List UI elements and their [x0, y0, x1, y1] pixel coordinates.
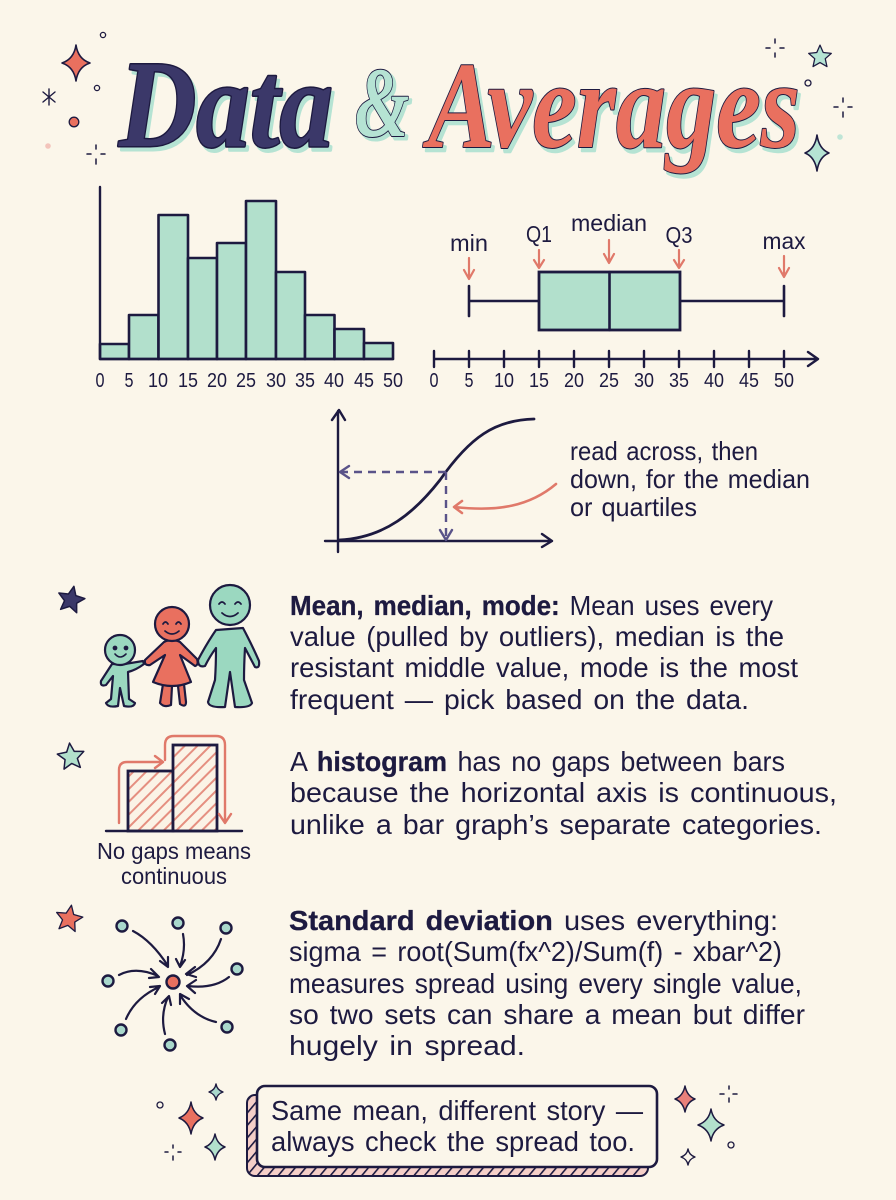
title word: Averages: Averages: [422, 37, 800, 174]
centre mean dot: [166, 976, 180, 988]
graph annotation: or quartiles: [570, 492, 697, 522]
box plot labels: Q1: [526, 221, 552, 247]
histogram axis labels: 15: [178, 370, 198, 392]
star bullet mint: [56, 742, 85, 770]
box plot number labels: 25: [599, 370, 619, 392]
flow arrow: [119, 736, 231, 823]
callout text: always check the spread too.: [271, 1126, 635, 1157]
graph axes: [325, 410, 552, 552]
box plot number labels: 40: [704, 370, 724, 392]
star bullet navy: [56, 584, 87, 614]
box plot number line: [434, 351, 818, 367]
box plot number labels: 20: [564, 370, 584, 392]
title sparkles left: [43, 32, 106, 164]
bottom sparkles left: [157, 1084, 225, 1160]
callout box: [257, 1086, 657, 1167]
box plot labels: min: [450, 230, 488, 256]
title word: Data: Data: [121, 40, 336, 177]
box plot labels: Q3: [666, 222, 692, 248]
histogram axes: [100, 187, 393, 359]
outer value dots: [102, 918, 242, 1050]
cumulative frequency graph: [325, 410, 810, 552]
icon: family of three: [101, 585, 259, 707]
box plot number labels: 30: [634, 370, 654, 392]
text block: histogram: [290, 746, 837, 840]
box plot: [430, 210, 818, 392]
no gaps caption: No gaps means: [97, 838, 251, 864]
box plot labels: [450, 210, 806, 256]
converging arrows: [119, 931, 229, 1034]
text block: histogram: because the horizontal axis is continuous,: [290, 777, 837, 808]
text block: mean median mode: value (pulled by outliers), median is the: [290, 621, 784, 652]
text block: standard deviation: so two sets can share a mean but differ: [289, 999, 805, 1030]
text block: mean median mode: [290, 590, 798, 715]
box plot labels: max: [762, 228, 806, 254]
star bullet coral: [54, 903, 85, 932]
histogram axis labels: 35: [295, 370, 315, 392]
s-curve: [339, 419, 534, 540]
text block: mean median mode: resistant middle value, mode is the most: [290, 652, 798, 683]
text block: histogram: A histogram has no gaps between bars: [290, 746, 785, 777]
box plot number labels: [430, 370, 794, 392]
title ampersand: &: [358, 50, 412, 161]
box plot number labels: 0: [430, 370, 438, 392]
box plot arrows: [464, 240, 789, 279]
small figure: [101, 635, 144, 707]
title word: Data: Data: [118, 36, 333, 173]
histogram axis labels: 10: [148, 370, 168, 392]
hatched bars: [128, 745, 217, 831]
coral pointer arrow: [454, 484, 556, 513]
box and whiskers: [469, 272, 784, 330]
histogram axis labels: 20: [207, 370, 227, 392]
title sparkles right: [766, 39, 852, 171]
box plot number labels: 35: [669, 370, 689, 392]
icon: values converging on the mean: [102, 918, 242, 1050]
text block: mean median mode: frequent — pick based on the data.: [290, 684, 749, 715]
text block: standard deviation: Standard deviation uses everything:: [289, 905, 778, 936]
box plot number labels: 45: [739, 370, 759, 392]
callout: [247, 1086, 657, 1176]
callout text: Same mean, different story —: [271, 1095, 643, 1126]
callout hatched shadow: [247, 1095, 648, 1176]
histogram axis labels: 5: [124, 370, 134, 392]
dashed read-off lines: [342, 471, 446, 473]
histogram axis labels: 50: [383, 370, 403, 392]
histogram: [96, 187, 403, 392]
histogram axis labels: 40: [324, 370, 344, 392]
text block: standard deviation: measures spread using every single value,: [289, 968, 802, 999]
middle figure: [145, 607, 198, 706]
graph annotation: down, for the median: [570, 464, 810, 494]
graph annotation: read across, then: [570, 436, 758, 466]
text block: mean median mode: Mean, median, mode: Mean uses every: [290, 590, 773, 621]
text block: standard deviation: [289, 905, 805, 1061]
title: [118, 36, 803, 178]
box plot number labels: 10: [494, 370, 514, 392]
text block: histogram: unlike a bar graph’s separate categories.: [290, 809, 822, 840]
no gaps caption: [97, 838, 251, 889]
dashed line arrowheads: [340, 466, 452, 540]
histogram axis labels: 0: [96, 370, 104, 392]
text block: standard deviation: sigma = root(Sum(fx^2)/Sum(f) - xbar^2): [289, 936, 782, 967]
baseline: [106, 830, 242, 832]
box plot number labels: 15: [529, 370, 549, 392]
graph annotation: [570, 436, 810, 522]
histogram axis labels: [96, 370, 403, 392]
box plot number labels: 50: [774, 370, 794, 392]
text block: standard deviation: hugely in spread.: [289, 1030, 525, 1061]
box plot labels: median: [571, 210, 647, 236]
histogram bars: [100, 201, 393, 359]
histogram axis labels: 45: [354, 370, 374, 392]
callout text: [271, 1095, 643, 1157]
no gaps caption: continuous: [121, 863, 227, 889]
title word: Averages: Averages: [425, 41, 803, 178]
histogram axis labels: 25: [236, 370, 256, 392]
bottom sparkles right: [675, 1086, 737, 1165]
box plot number labels: 5: [464, 370, 474, 392]
icon: no-gap bars: [97, 736, 251, 889]
histogram axis labels: 30: [266, 370, 286, 392]
title ampersand: &: [355, 47, 409, 158]
tall figure: [198, 585, 259, 707]
